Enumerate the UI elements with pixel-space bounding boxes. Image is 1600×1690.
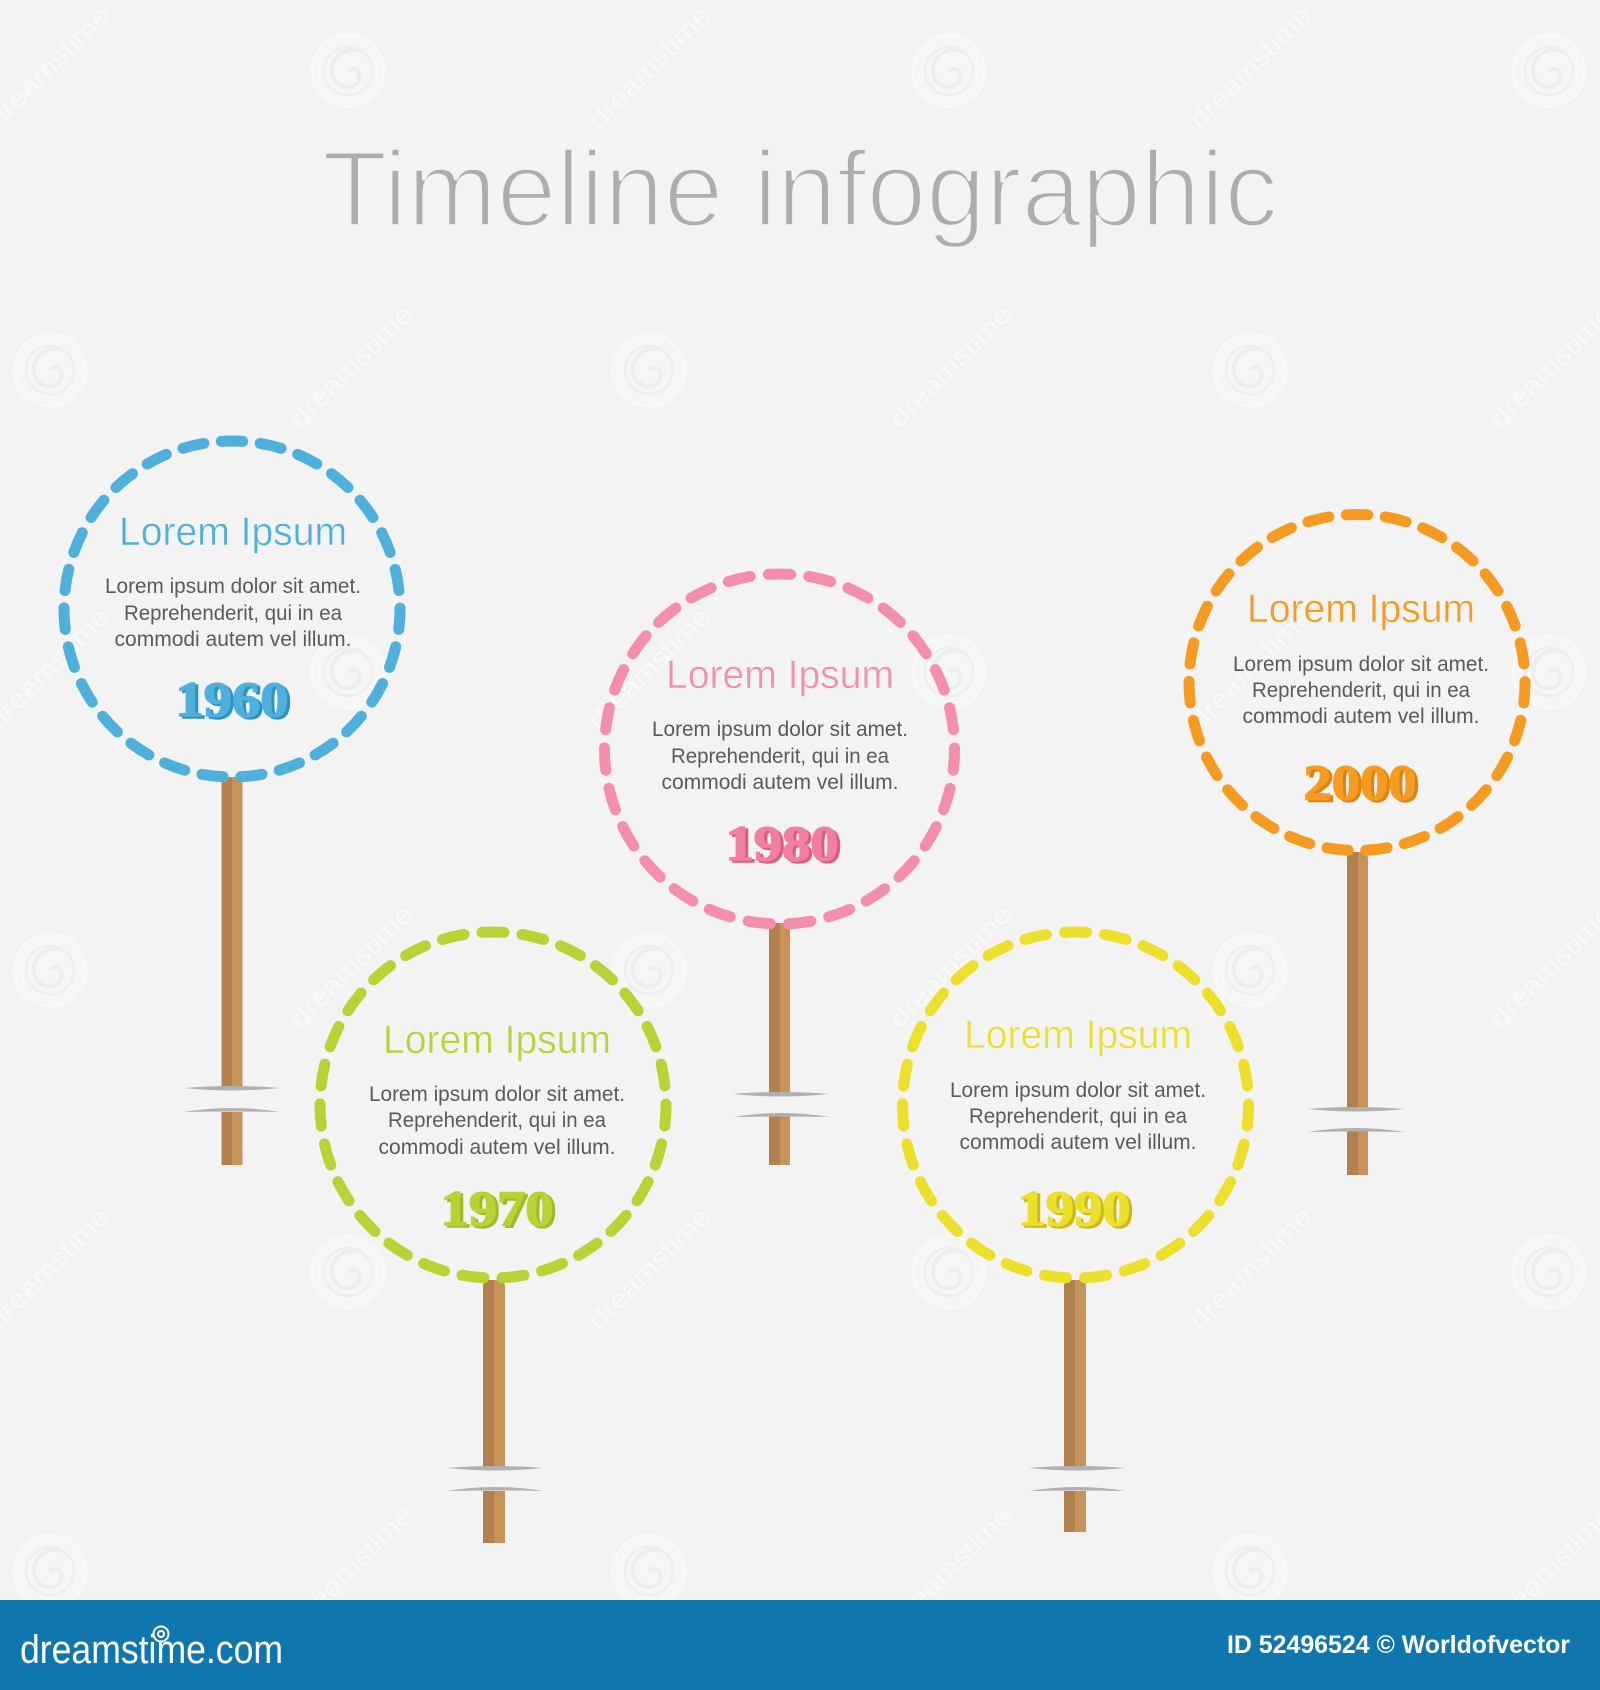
year 1990: 1990: [1018, 1180, 1130, 1236]
footer bar: [0, 1600, 1600, 1690]
pole 2000: [1308, 852, 1404, 1175]
body 1960: Lorem ipsum dolor sit amet.: [105, 575, 361, 598]
ring 1970: [311, 923, 675, 1287]
body 1960: commodi autem vel illum.: [114, 628, 352, 651]
watermark logos and diagonal text: dreamstime: [883, 1500, 1017, 1634]
brand name: dreamstime.com: [20, 1628, 283, 1672]
body 1970: Reprehenderit, qui in ea: [388, 1109, 606, 1132]
watermark logos and diagonal text: dreamstime: [582, 1201, 716, 1335]
year 1990: 1990: [1020, 1182, 1134, 1238]
watermark logos and diagonal text: dreamstime: [284, 899, 418, 1033]
year 1970: 1970: [444, 1182, 556, 1238]
body 1990: Reprehenderit, qui in ea: [969, 1105, 1187, 1128]
body 1980: commodi autem vel illum.: [662, 771, 898, 794]
body 1970: Lorem ipsum dolor sit amet.: [369, 1083, 625, 1106]
ring 1990: [894, 923, 1257, 1287]
watermark logos and diagonal text: dreamstime: [1484, 1500, 1600, 1634]
pole 1980: [733, 923, 829, 1165]
panel: 1980: [596, 565, 963, 1165]
heading 1980: Lorem Ipsum: [666, 653, 894, 697]
image id and credit: ID 52496524 © Worldofvector: [1227, 1631, 1570, 1659]
year 1980: 1980: [726, 815, 838, 871]
body 1970: commodi autem vel illum.: [378, 1136, 616, 1159]
watermark logos and diagonal text: dreamstime: [883, 299, 1017, 433]
panel: 2000: [1180, 506, 1534, 1175]
year 1960: 1960: [178, 673, 292, 729]
watermark logos and diagonal text: dreamstime: [1484, 899, 1600, 1033]
pole 1990: [1029, 1280, 1125, 1532]
body 1990: Lorem ipsum dolor sit amet.: [950, 1079, 1206, 1102]
body 2000: commodi autem vel illum.: [1242, 705, 1480, 728]
panel: 1990: [894, 923, 1257, 1532]
pole 1970: [447, 1280, 543, 1543]
watermark logos and diagonal text: dreamstime: [284, 1500, 418, 1634]
watermark logos and diagonal text: dreamstime: [284, 299, 418, 433]
body 2000: [1233, 653, 1489, 728]
year 1970: 1970: [440, 1180, 554, 1236]
panel: 1960: [55, 432, 409, 1165]
year 1980: 1980: [728, 817, 842, 873]
watermark logos and diagonal text: dreamstime: [1183, 0, 1317, 134]
watermark logos and diagonal text: dreamstime: [883, 899, 1017, 1033]
heading 1990: Lorem Ipsum: [964, 1013, 1192, 1057]
body 1970: [369, 1083, 625, 1159]
watermark logos and diagonal text: dreamstime: [1484, 299, 1600, 433]
body 2000: Reprehenderit, qui in ea: [1252, 679, 1470, 702]
ring 1980: [596, 565, 963, 933]
body 1990: commodi autem vel illum.: [960, 1131, 1196, 1154]
pole 1960: [184, 777, 280, 1165]
watermark logos and diagonal text: dreamstime: [582, 601, 716, 735]
body 1980: Lorem ipsum dolor sit amet.: [652, 718, 908, 741]
panel: 1970: [311, 923, 675, 1543]
ring 2000: [1180, 506, 1534, 859]
heading 1970: Lorem Ipsum: [383, 1018, 611, 1062]
watermark logos and diagonal text: dreamstime: [582, 0, 716, 134]
body 1960: [105, 575, 361, 651]
body 1990: [950, 1079, 1206, 1154]
icon: brand spiral: [154, 1626, 168, 1642]
heading 2000: Lorem Ipsum: [1247, 587, 1475, 631]
year 2000: 2000: [1306, 756, 1420, 812]
year 2000: 2000: [1304, 754, 1416, 810]
year 1960: 1960: [176, 671, 288, 727]
ring 1960: [55, 432, 409, 786]
watermark logos and diagonal text: dreamstime: [1183, 1201, 1317, 1335]
heading 1960: Lorem Ipsum: [119, 510, 347, 554]
body 1960: Reprehenderit, qui in ea: [124, 602, 342, 625]
body 1980: [652, 718, 908, 794]
watermark logos and diagonal text: dreamstime: [1183, 601, 1317, 735]
body 1980: Reprehenderit, qui in ea: [671, 745, 889, 768]
title: Timeline infographic: [322, 128, 1278, 249]
body 2000: Lorem ipsum dolor sit amet.: [1233, 653, 1489, 676]
